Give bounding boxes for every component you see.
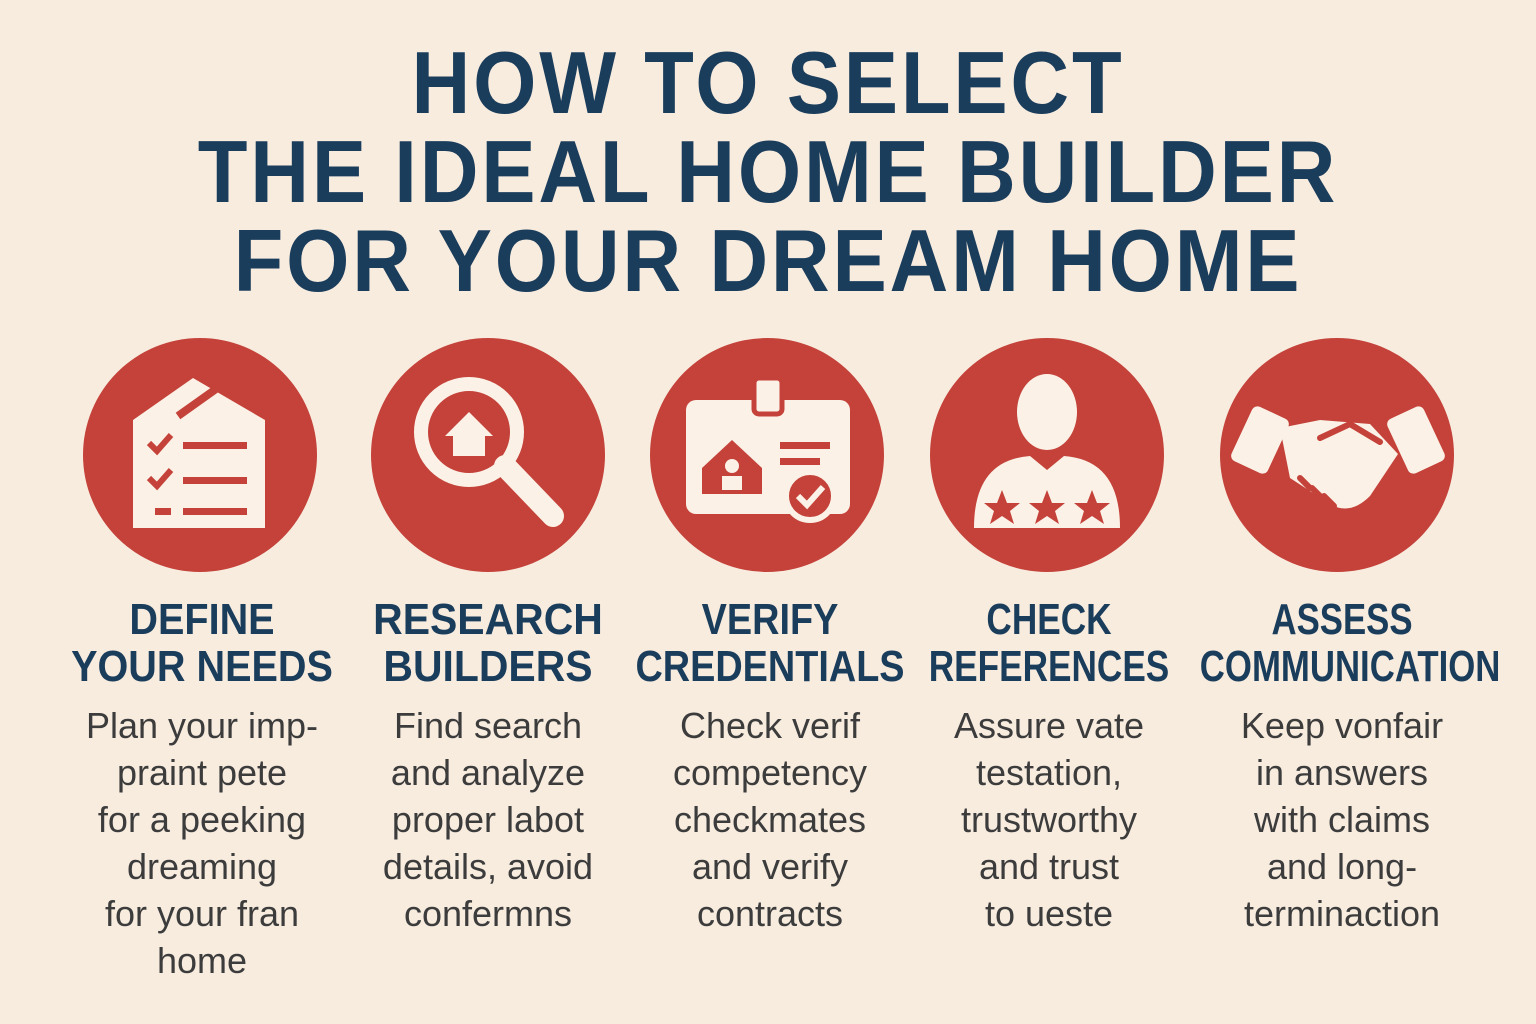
icon: handshake [1220,338,1454,572]
column: verify credentials: Check verif [680,705,860,746]
column: research builders: and analyze [391,752,585,793]
column: verify credentials: contracts [697,893,843,934]
column: check references: REFERENCES [929,642,1169,691]
column: verify credentials: checkmates [674,799,866,840]
column: check references: and trust [979,846,1119,887]
column: research builders: proper labot [392,799,584,840]
column: define your needs: for a peeking [98,799,306,840]
title: HOW TO SELECT [412,33,1124,132]
icon: magnifier house [371,338,605,572]
column: verify credentials: and verify [692,846,848,887]
column: assess communication: with claims [1254,799,1430,840]
column: assess communication: COMMUNICATION [1200,642,1500,691]
column: verify credentials: competency [673,752,867,793]
column: verify credentials: VERIFY [702,595,838,644]
column: define your needs: for your fran [105,893,299,934]
icon: checklist house [83,338,317,572]
column: assess communication: ASSESS [1271,595,1413,644]
column: define your needs: praint pete [117,752,287,793]
column: check references: testation, [976,752,1122,793]
column: verify credentials [635,595,905,934]
column: verify credentials: CREDENTIALS [635,642,905,691]
column: research builders: BUILDERS [383,642,593,691]
icon: person with stars [930,338,1164,572]
column: assess communication: terminaction [1244,893,1440,934]
column: define your needs: home [157,940,247,981]
column: define your needs [71,595,333,981]
column: define your needs: Plan your imp- [86,705,318,746]
column: check references: Assure vate [954,705,1144,746]
title: THE IDEAL HOME BUILDER [198,122,1338,221]
title: FOR YOUR DREAM HOME [234,211,1302,310]
column: check references: CHECK [986,595,1112,644]
column: research builders: Find search [394,705,582,746]
column: research builders: RESEARCH [373,595,603,644]
title [198,33,1338,310]
column: assess communication [1200,595,1500,934]
column: assess communication: and long- [1267,846,1417,887]
column: define your needs: DEFINE [129,595,275,644]
column: check references: to ueste [985,893,1113,934]
icon: credentials card [650,338,884,572]
column: check references: trustworthy [961,799,1137,840]
column: research builders: confermns [404,893,572,934]
column: assess communication: in answers [1256,752,1428,793]
column: assess communication: Keep vonfair [1241,705,1443,746]
column: define your needs: dreaming [127,846,277,887]
column: check references [929,595,1169,934]
column: research builders: details, avoid [383,846,593,887]
column: define your needs: YOUR NEEDS [71,642,333,691]
column: research builders [373,595,603,934]
